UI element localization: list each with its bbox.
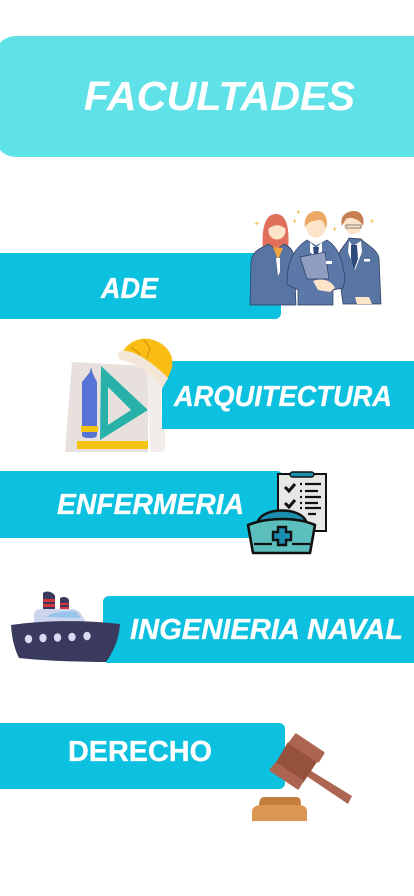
panel: ENFERMERIA xyxy=(0,471,283,538)
cap xyxy=(258,510,306,521)
funnels xyxy=(43,592,55,610)
head xyxy=(275,742,317,783)
panel: INGENIERIA NAVAL xyxy=(103,596,414,663)
panel: ADE xyxy=(0,253,281,319)
label: ADE: ADE xyxy=(100,273,160,305)
icon: nurse cap and clipboard xyxy=(248,472,326,553)
label: INGENIERIA NAVAL: INGENIERIA NAVAL xyxy=(130,614,403,646)
header banner xyxy=(0,36,414,157)
base xyxy=(259,797,301,807)
icon: ship xyxy=(11,592,120,662)
label: ENFERMERIA: ENFERMERIA xyxy=(57,489,244,521)
panel: DERECHO xyxy=(0,723,285,789)
set square xyxy=(100,366,148,440)
icon: gavel xyxy=(252,735,352,821)
hull xyxy=(11,621,120,662)
panel: ARQUITECTURA xyxy=(162,361,414,429)
helmet xyxy=(122,339,172,380)
icon: business people xyxy=(250,210,381,305)
portholes xyxy=(25,632,91,643)
handle xyxy=(305,769,352,804)
woman xyxy=(263,214,288,250)
label: DERECHO: DERECHO xyxy=(68,736,212,768)
sparkles xyxy=(255,210,374,231)
label: ARQUITECTURA: ARQUITECTURA xyxy=(173,381,392,413)
cabin xyxy=(34,609,86,623)
pencil xyxy=(82,367,97,438)
clipboard xyxy=(278,474,326,530)
right man xyxy=(337,238,381,304)
middle man xyxy=(287,240,345,305)
ruler xyxy=(77,441,148,449)
title: FACULTADES xyxy=(84,73,355,119)
icon: architecture plan and helmet xyxy=(65,339,172,452)
